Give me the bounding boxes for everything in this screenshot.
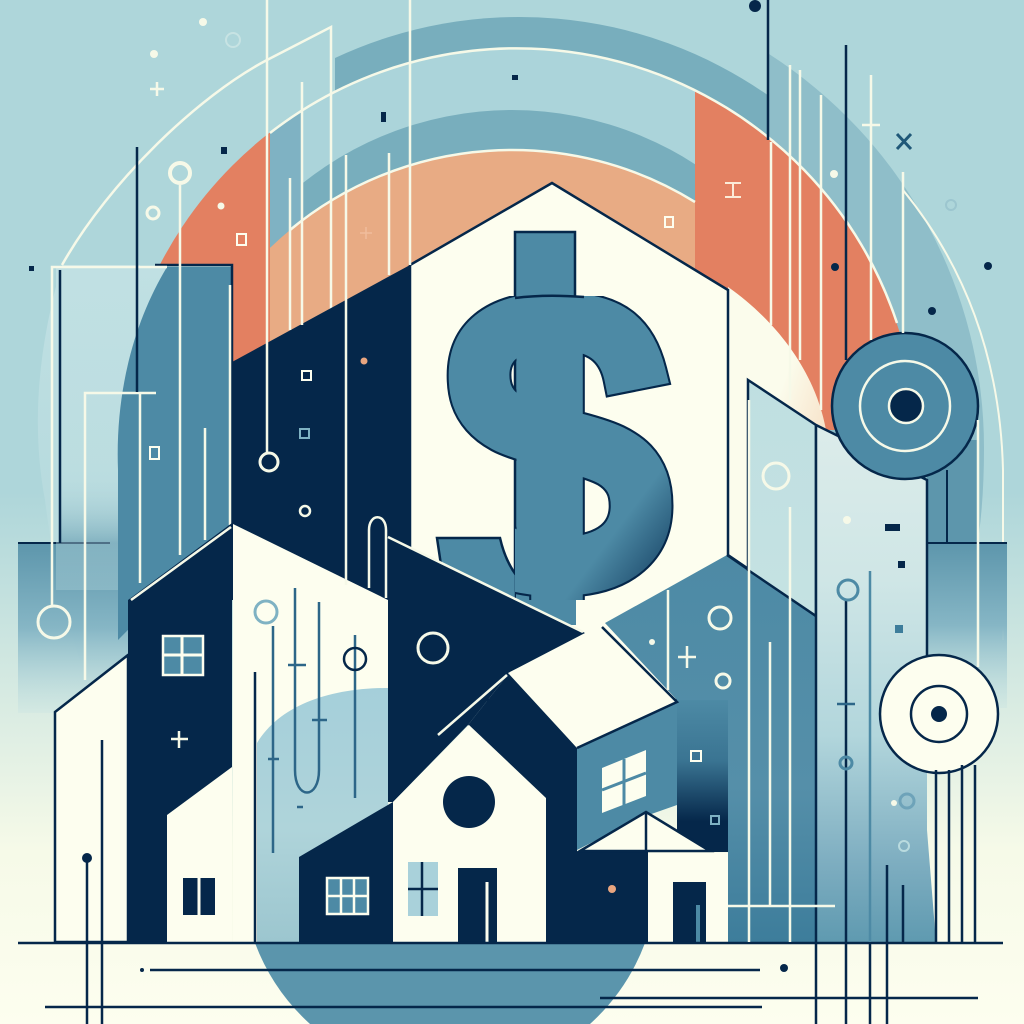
- front navy house block: [299, 672, 648, 942]
- blue middle house: [605, 555, 816, 942]
- chimney and roof highlight: [369, 517, 583, 632]
- concentric arcs: [160, 17, 984, 566]
- target circle lower: [880, 655, 998, 773]
- white arc outlines: [62, 27, 1003, 640]
- blue left tower: [52, 147, 232, 680]
- navy tower: [232, 265, 410, 600]
- dollar sign: $: [446, 214, 664, 672]
- dollar sign: $: [446, 214, 664, 672]
- side speckled panels: [18, 440, 1007, 713]
- left houses: [55, 523, 388, 942]
- ground and lower semicircle: [18, 943, 1003, 1024]
- dark middle house: [388, 538, 585, 802]
- corner roof house: [438, 627, 677, 850]
- big cream centre house: [410, 183, 750, 700]
- left pale halo: [38, 265, 140, 660]
- right pale buildings: [748, 380, 936, 1024]
- target circle upper: [832, 333, 978, 479]
- front cream house: [393, 725, 546, 942]
- small front house: [580, 812, 728, 942]
